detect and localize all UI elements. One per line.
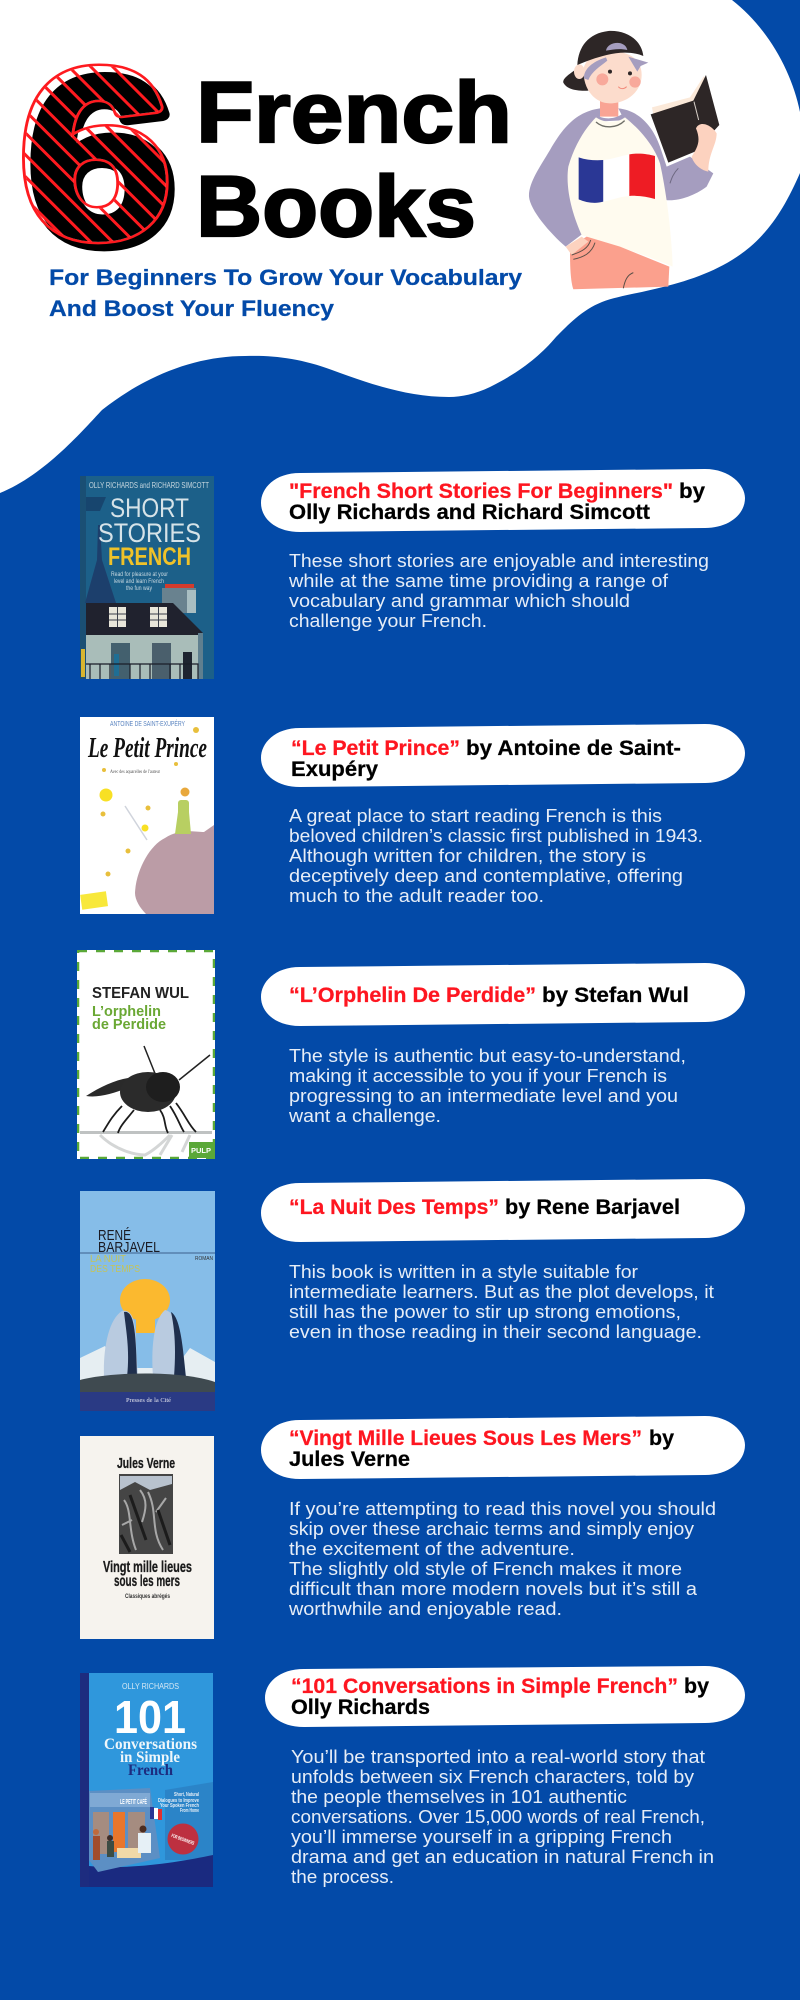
- description: A great place to start reading French is this: [289, 806, 662, 826]
- pill heading: by Antoine de Saint-: [466, 737, 681, 760]
- description: difficult than more modern novels but it’s still a: [289, 1579, 698, 1599]
- book cover: L'Orphelin de Perdide: de Perdide: [92, 1016, 166, 1033]
- title: French: [196, 65, 512, 161]
- subtitle: [49, 265, 523, 321]
- big number 6: 6: [26, 29, 177, 294]
- description: the people themselves in 101 authentic: [291, 1787, 627, 1807]
- big number 6: 6: [20, 22, 171, 287]
- pill heading: Olly Richards: [291, 1696, 430, 1719]
- description: challenge your French.: [289, 611, 487, 631]
- pill heading: by: [684, 1675, 709, 1698]
- book cover: 101 Conversations in Simple French: From Home: [180, 1808, 199, 1814]
- description: You’ll be transported into a real-world story that: [291, 1747, 705, 1767]
- book cover: Vingt Mille Lieues Sous Les Mers: [80, 1436, 214, 1639]
- panel: book 4: [80, 1179, 745, 1411]
- description: even in those reading in their second language.: [289, 1322, 702, 1342]
- pill heading: "French Short Stories For Beginners": [289, 480, 673, 503]
- pill heading: “Vingt Mille Lieues Sous Les Mers”: [289, 1427, 642, 1450]
- book cover: 101 Conversations in Simple French: in Simple: [120, 1749, 180, 1766]
- pill heading: [261, 1416, 745, 1479]
- book cover: 101 Conversations in Simple French: 101: [114, 1691, 186, 1743]
- title: Books: [196, 159, 476, 255]
- pill heading: [261, 963, 745, 1026]
- book cover: Short Stories in French: STORIES: [98, 518, 201, 548]
- description: vocabulary and grammar which should: [289, 591, 630, 611]
- book cover: La Nuit Des Temps: DES TEMPS: [90, 1264, 140, 1275]
- pill heading: Olly Richards and Richard Simcott: [289, 501, 650, 524]
- book cover: Vingt Mille Lieues Sous Les Mers: Classiques abrégés: [125, 1593, 170, 1600]
- icon: student reading a book with French flag shirt: [529, 31, 719, 289]
- book cover: La Nuit Des Temps: Presses de la Cité: [126, 1398, 171, 1404]
- pill heading: “Le Petit Prince”: [291, 737, 460, 760]
- description: These short stories are enjoyable and interesting: [289, 551, 709, 571]
- description: progressing to an intermediate level and you: [289, 1086, 678, 1106]
- book cover: Short Stories in French: OLLY RICHARDS and RICHARD SIMCOTT: [89, 480, 209, 490]
- description: The slightly old style of French makes it more: [289, 1559, 682, 1579]
- description: still has the power to stir up strong emotions,: [289, 1302, 681, 1322]
- book cover: 101 Conversations in Simple French: Your Spoken French: [160, 1803, 199, 1809]
- pill heading: Jules Verne: [289, 1448, 410, 1471]
- description: the process.: [291, 1867, 394, 1887]
- book cover: Short Stories in French: [80, 476, 214, 679]
- book cover: L'Orphelin de Perdide: STEFAN WUL: [92, 985, 189, 1002]
- description: beloved children’s classic first published in 1943.: [289, 826, 703, 846]
- description: worthwhile and enjoyable read.: [288, 1599, 562, 1619]
- book cover: 101 Conversations in Simple French: [80, 1673, 213, 1887]
- pill heading: “L’Orphelin De Perdide”: [289, 984, 536, 1007]
- big number 6: 6: [25, 28, 177, 293]
- book cover: Short Stories in French: Read for pleasure at your: [111, 572, 168, 578]
- book cover: La Nuit Des Temps: LA NUIT: [90, 1254, 126, 1265]
- pill heading: by: [649, 1427, 674, 1450]
- description: you’ll immerse yourself in a gripping French: [291, 1827, 672, 1847]
- book cover: Short Stories in French: FRENCH: [108, 543, 191, 571]
- description: Although written for children, the story is: [289, 846, 646, 866]
- book cover: L'Orphelin de Perdide: [77, 950, 215, 1159]
- description: [288, 1499, 716, 1619]
- book cover: Le Petit Prince: Le Petit Prince: [87, 733, 207, 764]
- description: intermediate learners. But as the plot develops, it: [289, 1282, 714, 1302]
- panel: book 3: [77, 950, 745, 1159]
- book cover: 101 Conversations in Simple French: Conversations: [104, 1736, 197, 1753]
- book cover: Short Stories in French: level and learn French: [114, 579, 164, 585]
- description: much to the adult reader too.: [289, 886, 544, 906]
- panel: book 6: [80, 1666, 745, 1887]
- pill heading: [261, 469, 745, 532]
- pill heading: “101 Conversations in Simple French”: [291, 1675, 678, 1698]
- subtitle: And Boost Your Fluency: [49, 296, 335, 321]
- pill heading: by Stefan Wul: [542, 984, 689, 1007]
- book cover: Vingt Mille Lieues Sous Les Mers: sous les mers: [114, 1573, 180, 1590]
- pill heading: Exupéry: [291, 758, 378, 781]
- description: If you’re attempting to read this novel you should: [289, 1499, 716, 1519]
- pill heading: by Rene Barjavel: [505, 1196, 680, 1219]
- description: conversations. Over 15,000 words of real French,: [291, 1807, 705, 1827]
- description: This book is written in a style suitable for: [289, 1262, 638, 1282]
- big number 6: 6: [20, 22, 171, 287]
- book cover: Short Stories in French: the fun way: [126, 586, 152, 592]
- book cover: Vingt Mille Lieues Sous Les Mers: Vingt mille lieues: [103, 1559, 192, 1576]
- book cover: Le Petit Prince: [80, 717, 214, 914]
- white header blob: [0, 0, 800, 493]
- book cover: Le Petit Prince: Avec des aquarelles de l'auteur: [110, 770, 160, 775]
- description: the excitement of the adventure.: [289, 1539, 575, 1559]
- book cover: La Nuit Des Temps: BARJAVEL: [98, 1239, 160, 1256]
- description: while at the same time providing a range of: [288, 571, 669, 591]
- book cover: 101 Conversations in Simple French: Short, Natural: [174, 1792, 199, 1798]
- book cover: 101 Conversations in Simple French: FOR BEGINNERS: [170, 1833, 195, 1847]
- description: want a challenge.: [288, 1106, 441, 1126]
- big number 6: [22, 64, 175, 252]
- book cover: 101 Conversations in Simple French: LE PETIT CAFÉ: [120, 1797, 147, 1806]
- book cover: 101 Conversations in Simple French: OLLY RICHARDS: [122, 1682, 179, 1691]
- description: [288, 1046, 686, 1126]
- book cover: Le Petit Prince: ANTOINE DE SAINT-EXUPÉRY: [110, 719, 185, 728]
- description: The style is authentic but easy-to-understand,: [289, 1046, 686, 1066]
- book cover: L'Orphelin de Perdide: PULP: [191, 1148, 211, 1155]
- pill heading: [265, 1666, 745, 1727]
- book cover: La Nuit Des Temps: [80, 1191, 215, 1411]
- description: [288, 551, 709, 631]
- description: making it accessible to you if your French is: [289, 1066, 667, 1086]
- book cover: L'Orphelin de Perdide: L’orphelin: [92, 1003, 161, 1020]
- description: [289, 1262, 714, 1342]
- description: deceptively deep and contemplative, offering: [289, 866, 683, 886]
- book cover: 101 Conversations in Simple French: Dialogues to Improve: [158, 1798, 199, 1804]
- description: [289, 806, 703, 906]
- panel: book 1: [80, 469, 745, 679]
- book cover: Short Stories in French: SHORT: [110, 493, 189, 523]
- description: skip over these archaic terms and simply enjoy: [289, 1519, 694, 1539]
- book cover: La Nuit Des Temps: RENÉ: [98, 1227, 131, 1244]
- panel: book 5: [80, 1416, 745, 1639]
- book cover: Vingt Mille Lieues Sous Les Mers: Jules Verne: [117, 1455, 175, 1472]
- book cover: La Nuit Des Temps: ROMAN: [195, 1256, 213, 1262]
- pill heading: “La Nuit Des Temps”: [289, 1196, 499, 1219]
- panel: book 2: [80, 717, 745, 914]
- pill heading: [261, 724, 745, 787]
- subtitle: For Beginners To Grow Your Vocabulary: [49, 265, 523, 290]
- description: drama and get an education in natural French in: [291, 1847, 714, 1867]
- pill heading: by: [679, 480, 705, 503]
- book cover: 101 Conversations in Simple French: French: [128, 1762, 173, 1779]
- description: [291, 1747, 714, 1887]
- pill heading: [261, 1179, 745, 1242]
- description: unfolds between six French characters, told by: [291, 1767, 694, 1787]
- title: [196, 65, 512, 255]
